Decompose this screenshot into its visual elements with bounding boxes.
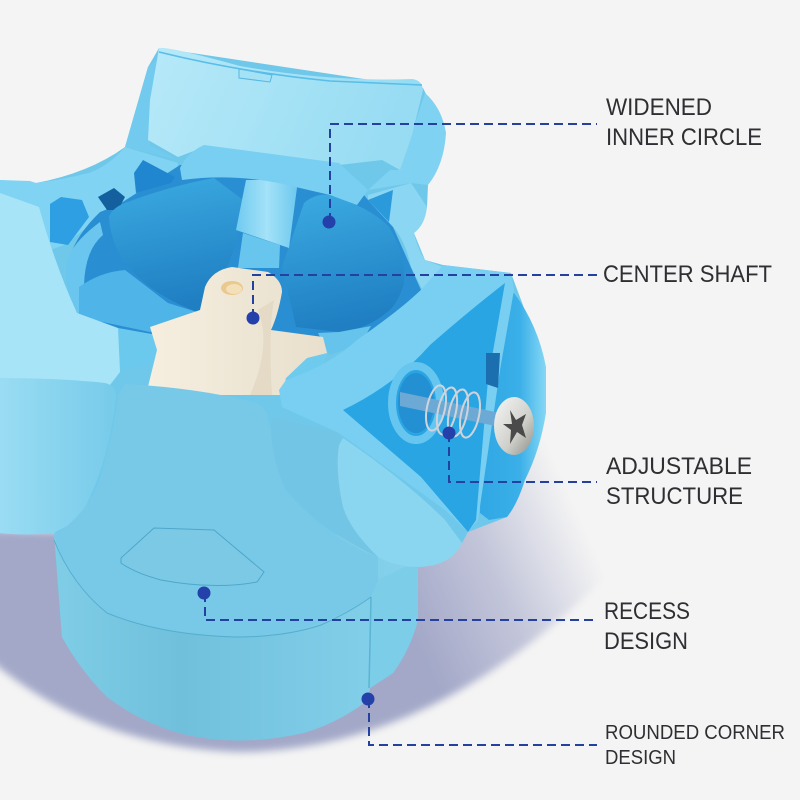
callout: center shaft	[246, 261, 772, 324]
adjustable ring	[392, 366, 440, 440]
center face piece	[54, 384, 378, 637]
base seam	[369, 597, 371, 688]
right arm shaft	[286, 352, 328, 378]
shaft wide	[236, 180, 298, 248]
top piece clip tab	[239, 69, 272, 82]
left disk	[109, 178, 243, 313]
screw cross	[503, 410, 526, 444]
label: DESIGN	[605, 747, 676, 769]
spring	[422, 384, 484, 439]
dark window	[98, 188, 125, 210]
label: WIDENED	[606, 94, 712, 121]
right crescent	[338, 438, 462, 567]
cast shadow	[0, 405, 640, 752]
left lower piece	[0, 378, 116, 534]
arc under face	[54, 540, 371, 637]
left inner arc	[66, 222, 103, 318]
label: DESIGN	[604, 628, 688, 655]
corner side slat	[486, 353, 500, 388]
right side piece	[368, 183, 443, 295]
center beige hub	[146, 267, 327, 395]
screw head	[494, 397, 534, 455]
callout: widened inner circle	[322, 94, 762, 228]
left window	[50, 197, 89, 245]
left lower cylinder	[79, 270, 200, 332]
base cylinder	[54, 520, 418, 740]
label: INNER CIRCLE	[606, 124, 762, 151]
silhouette underlay	[0, 48, 546, 740]
left large lobe	[0, 193, 120, 385]
illustration: opened cube	[0, 48, 546, 741]
label: STRUCTURE	[606, 483, 743, 510]
label: ROUNDED CORNER	[605, 722, 785, 744]
callout: rounded corner design	[362, 692, 785, 769]
label: CENTER SHAFT	[603, 261, 772, 288]
top arc plate	[180, 145, 368, 205]
top piece rim	[159, 52, 422, 85]
recess outline	[121, 528, 264, 586]
top piece	[148, 48, 423, 170]
lower right blue	[318, 326, 371, 355]
corner piece	[279, 265, 514, 532]
left arm shaft	[118, 328, 157, 370]
label: RECESS	[604, 598, 690, 625]
right disk	[282, 195, 404, 332]
interior well	[68, 165, 421, 350]
right lower piece	[271, 417, 378, 557]
upper left connector	[0, 147, 178, 250]
base side piece	[370, 567, 418, 688]
shaft narrow	[238, 233, 280, 268]
blue window	[134, 160, 175, 193]
screw shaft	[400, 392, 505, 428]
far right outer piece	[368, 93, 446, 190]
hub hole	[221, 281, 243, 295]
callout: adjustable structure	[442, 426, 752, 510]
corner right shell	[480, 293, 546, 520]
callout: recess design	[198, 586, 690, 655]
corner interior	[343, 283, 505, 532]
hub side shade	[250, 300, 274, 395]
right blue window	[368, 190, 393, 222]
far left strip	[125, 60, 178, 160]
label: ADJUSTABLE	[606, 453, 752, 480]
